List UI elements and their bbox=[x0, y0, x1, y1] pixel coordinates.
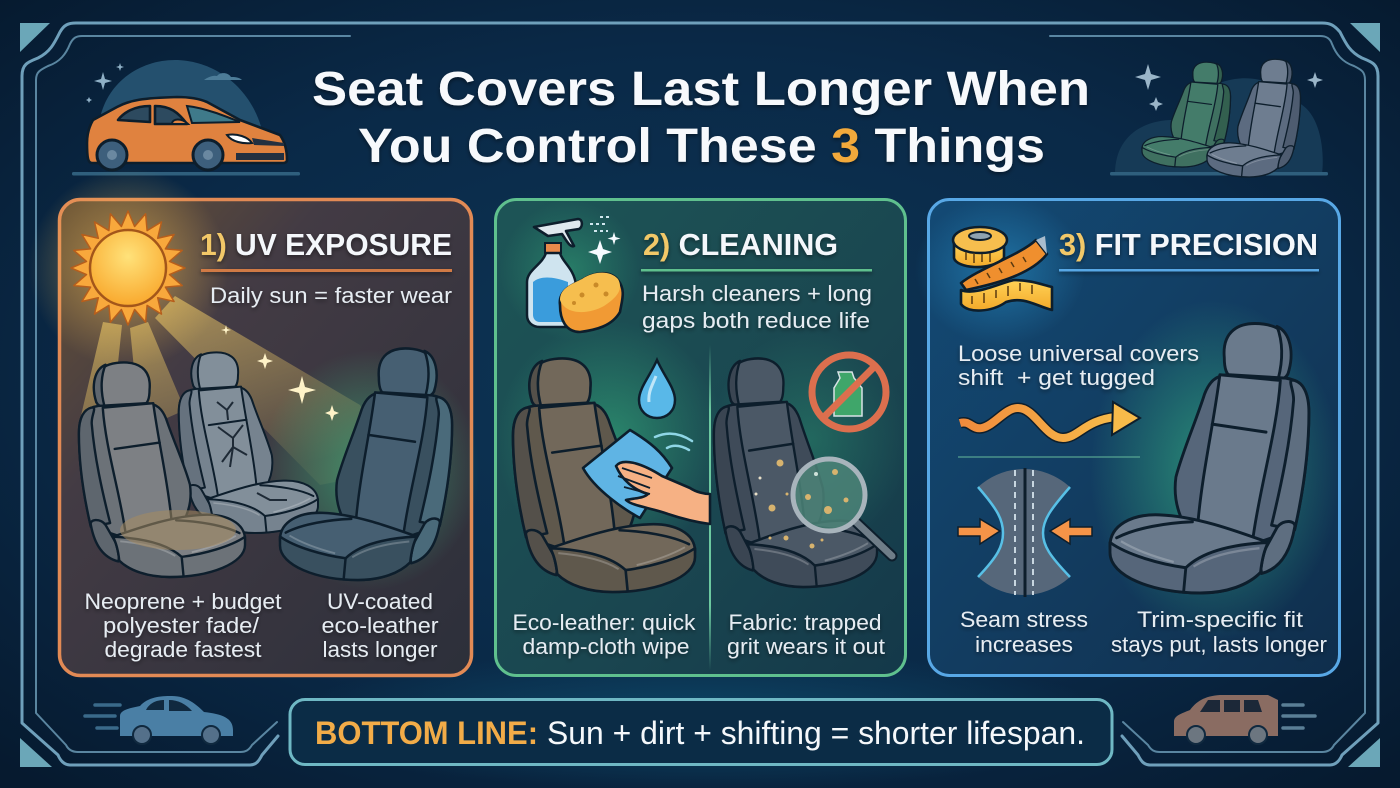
caption: neoprene: Neoprene + budget bbox=[84, 589, 282, 614]
caption: neoprene: polyester fade/ bbox=[103, 613, 260, 638]
caption: fabric: grit wears it out bbox=[727, 634, 885, 659]
panel: fit precision bbox=[915, 195, 1340, 676]
text: loose covers bbox=[958, 341, 1199, 390]
icon: magnifier bbox=[793, 459, 892, 556]
caption: UV-coated bbox=[322, 589, 438, 662]
caption: eco-leather: Eco-leather: quick bbox=[512, 610, 697, 635]
title: You Control These 3 Things bbox=[358, 120, 1045, 173]
icon: right SUV bbox=[1174, 695, 1315, 744]
icon: sun bbox=[71, 211, 185, 325]
caption: fabric bbox=[727, 610, 885, 659]
sun glow and beams bbox=[28, 168, 480, 590]
caption: neoprene bbox=[84, 589, 282, 662]
seat: trim-specific fit bbox=[1110, 324, 1309, 593]
heading: UV exposure: 1) UV EXPOSURE bbox=[200, 227, 452, 262]
seat: cracked bbox=[179, 352, 318, 533]
caption: UV-coated: lasts longer bbox=[322, 637, 438, 662]
sparkles bbox=[221, 325, 339, 421]
title: Seat Covers Last Longer When bbox=[312, 63, 1090, 116]
heading: cleaning: 2) CLEANING bbox=[643, 227, 838, 262]
seat: fabric bbox=[714, 358, 877, 587]
icon: seat pair bbox=[1110, 59, 1328, 177]
caption: trim-specific fit bbox=[1111, 607, 1327, 657]
text: harsh cleaners: gaps both reduce life bbox=[642, 308, 870, 333]
caption: neoprene: degrade fastest bbox=[104, 637, 262, 662]
caption: eco-leather: damp-cloth wipe bbox=[522, 634, 690, 659]
seat: UV-coated bbox=[280, 348, 452, 580]
icon: squiggle arrow bbox=[960, 402, 1140, 438]
icon: cloth and hand bbox=[583, 430, 710, 524]
icon: no harsh cleaner bbox=[812, 355, 886, 429]
caption: UV-coated: UV-coated bbox=[327, 589, 433, 614]
icon: orange car bbox=[72, 60, 300, 176]
text: loose covers: shift + get tugged bbox=[958, 365, 1155, 390]
text: harsh cleaners: Harsh cleaners + long bbox=[642, 281, 872, 306]
text: loose covers: Loose universal covers bbox=[958, 341, 1199, 366]
caption: trim-specific fit: stays put, lasts longer bbox=[1111, 632, 1327, 657]
icon: tape measure bbox=[953, 227, 1052, 311]
title bbox=[312, 63, 1090, 173]
caption: trim-specific fit: Trim-specific fit bbox=[1137, 607, 1303, 632]
caption: eco-leather bbox=[512, 610, 697, 659]
text: harsh cleaners bbox=[642, 281, 872, 333]
caption: UV-coated: eco-leather bbox=[322, 613, 438, 638]
text: daily sun: Daily sun = faster wear bbox=[210, 283, 452, 308]
icon: seam stress bbox=[958, 468, 1092, 597]
caption: fabric: Fabric: trapped bbox=[728, 610, 882, 635]
seat: eco-leather bbox=[513, 358, 695, 592]
caption: seam stress: Seam stress bbox=[960, 607, 1088, 632]
callout: bottom line bbox=[290, 700, 1112, 764]
panel: cleaning bbox=[495, 200, 910, 676]
panel: UV exposure bbox=[28, 168, 480, 676]
heading: fit precision: 3) FIT PRECISION bbox=[1059, 227, 1318, 262]
icon: spray bottle and sponge bbox=[527, 217, 623, 332]
caption: seam stress: increases bbox=[975, 632, 1073, 657]
caption: seam stress bbox=[960, 607, 1088, 657]
icon: left car bbox=[85, 696, 233, 744]
divider bbox=[709, 345, 711, 670]
callout: bottom line: Sun + dirt + shifting = shorter lifespan. bbox=[547, 715, 1085, 751]
icon: water drop bbox=[639, 360, 692, 450]
seat: faded bbox=[79, 362, 245, 577]
callout: bottom line: BOTTOM LINE: bbox=[315, 715, 538, 751]
